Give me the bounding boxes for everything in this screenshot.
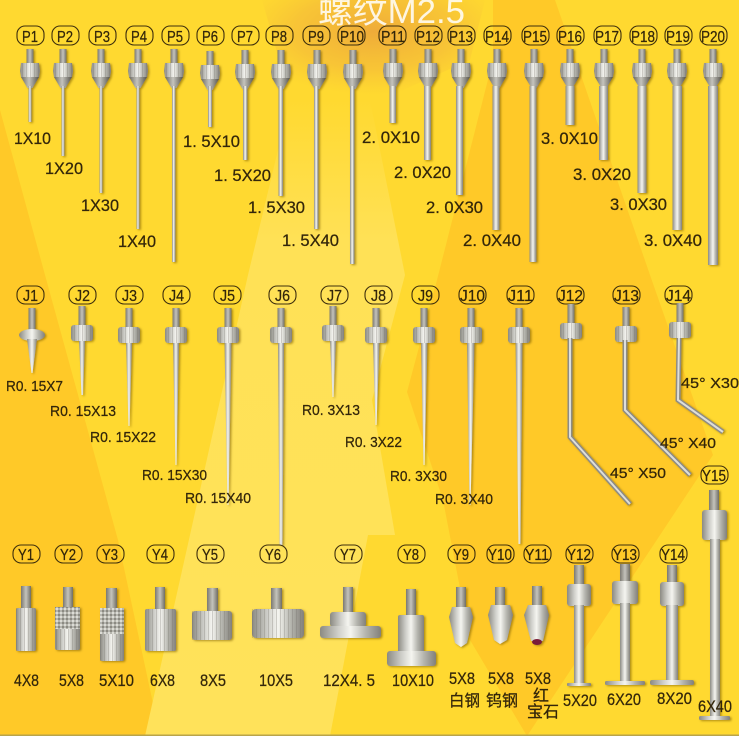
tag J3: J3: [122, 288, 137, 305]
pin P9: [307, 50, 327, 229]
pin J3: [118, 308, 140, 426]
size R0.15X22: R0. 15X22: [90, 429, 156, 446]
pin P2: [53, 49, 73, 156]
size 1X20: 1X20: [45, 160, 83, 178]
pin P5: [164, 49, 184, 262]
tag P13: P13: [449, 29, 473, 46]
pin J2: [71, 306, 93, 395]
tag P15: P15: [523, 29, 547, 46]
size 12X4.5: 12X4. 5: [323, 672, 375, 690]
tag Y1: [13, 545, 40, 564]
pin P13: [451, 49, 471, 195]
tag Y14: Y14: [661, 547, 685, 564]
tag J8: J8: [371, 288, 386, 305]
pin J8: [365, 308, 387, 425]
size and material Y10: 5X8: [488, 670, 514, 688]
size 1.5X20: 1. 5X20: [214, 167, 271, 185]
tag P6: P6: [202, 29, 218, 46]
size R0.3X22: R0. 3X22: [345, 434, 402, 451]
tag Y8: [398, 545, 425, 564]
size 6X8: 6X8: [150, 672, 175, 690]
pin J14, bent: [669, 303, 723, 432]
pin P8: [271, 50, 291, 196]
size 45 degree X30: 45° X30: [681, 375, 739, 392]
size 1.5X30: 1. 5X30: [248, 199, 305, 217]
pin J13, bent: [615, 307, 690, 475]
tag J2: [69, 286, 96, 305]
panel: P series pins: [14, 26, 727, 265]
size R0.3X13: R0. 3X13: [302, 402, 360, 419]
tag P12: P12: [416, 29, 440, 46]
tag Y3: Y3: [102, 547, 118, 564]
size 5X20: 5X20: [563, 692, 597, 710]
tag Y5: Y5: [202, 547, 218, 564]
tag J1: [17, 286, 44, 305]
tag J1: J1: [23, 288, 38, 305]
pin P18: [632, 49, 652, 193]
tag J4: J4: [169, 288, 184, 305]
tag Y5: [197, 545, 224, 564]
size 2.0X20: 2. 0X20: [394, 164, 451, 182]
tag P8: P8: [271, 29, 287, 46]
pin J5: [217, 308, 239, 505]
tag P11: P11: [381, 29, 405, 46]
pin P11: [383, 49, 403, 123]
tag J7: [321, 286, 348, 305]
size and material Y9: 5X8: [449, 670, 475, 688]
size 1X10: 1X10: [14, 130, 51, 148]
size and material Y11: 红: [533, 687, 549, 705]
size 8X5: 8X5: [200, 672, 226, 690]
pin J10: [460, 308, 482, 505]
size 3.0X20: 3. 0X20: [573, 166, 631, 184]
tag P16: P16: [558, 29, 582, 46]
tag P2: [52, 26, 79, 46]
tag Y4: Y4: [152, 547, 168, 564]
size and material Y11: [525, 670, 559, 721]
size R0.15X13: R0. 15X13: [50, 403, 116, 420]
pin P16: [560, 49, 580, 125]
tag P9: [303, 26, 330, 46]
pin P19: [667, 49, 687, 230]
tag Y4: [147, 545, 174, 564]
tag Y3: [97, 545, 124, 564]
pin P4: [128, 49, 148, 229]
pin P6: [200, 51, 220, 127]
tag P14: P14: [485, 29, 509, 46]
tag J14: J14: [666, 288, 691, 305]
tip Y10: [488, 587, 513, 644]
size 10X10: 10X10: [392, 672, 434, 690]
pin P1: [20, 49, 40, 122]
tip Y7: [320, 587, 381, 638]
tip Y1: [16, 586, 36, 651]
tag P2: P2: [57, 29, 73, 46]
size 2.0X30: 2. 0X30: [426, 199, 483, 217]
tag Y12: Y12: [567, 547, 591, 564]
tag J9: J9: [418, 288, 433, 305]
tag P6: [197, 26, 224, 46]
tag Y2: Y2: [60, 547, 76, 564]
size 3.0X40: 3. 0X40: [644, 232, 702, 250]
pin P20: [703, 49, 723, 265]
tag Y6: Y6: [265, 547, 281, 564]
tag J13: J13: [614, 288, 639, 305]
size and material Y11: 宝石: [527, 703, 559, 721]
size 6X40: 6X40: [698, 698, 732, 716]
size R0.15X7: R0. 15X7: [6, 378, 63, 395]
size 2.0X10: 2. 0X10: [362, 129, 420, 147]
size 1.5X40: 1. 5X40: [282, 232, 339, 250]
pin J1: [19, 308, 45, 373]
tag Y11: Y11: [525, 547, 549, 564]
tag J6: [269, 286, 296, 305]
tag J6: J6: [275, 288, 290, 305]
size 45 degree X40: 45° X40: [660, 435, 716, 452]
tag J2: J2: [75, 288, 90, 305]
pin P15: [524, 49, 544, 262]
tip Y4: [145, 587, 176, 651]
tag P20: P20: [701, 29, 725, 46]
tag P1: P1: [22, 29, 38, 46]
tag J5: J5: [220, 288, 235, 305]
tag P5: P5: [167, 29, 183, 46]
size 1.5X10: 1. 5X10: [183, 133, 240, 151]
size R0.15X40: R0. 15X40: [185, 490, 251, 507]
size 1X30: 1X30: [81, 197, 119, 215]
tag Y9: [448, 545, 475, 564]
pin P17: [594, 49, 614, 160]
tag P5: [162, 26, 189, 46]
tag P8: [266, 26, 293, 46]
size R0.3X40: R0. 3X40: [435, 491, 493, 508]
size and material Y9: 白钢: [449, 692, 480, 710]
tip Y6: [252, 588, 304, 638]
tag Y13: Y13: [613, 547, 637, 564]
tag P3: [89, 26, 116, 46]
panel: J series pins: [6, 286, 739, 545]
tip Y3: [100, 588, 124, 661]
pin P10: [343, 50, 363, 264]
size and material Y10: 钨钢: [486, 692, 518, 710]
size and material Y10: [486, 670, 518, 710]
tag J11: J11: [508, 288, 533, 305]
tag P3: P3: [94, 29, 110, 46]
pin J4: [165, 308, 187, 465]
tag J10: J10: [460, 288, 485, 305]
pin J9: [413, 308, 435, 465]
tip Y12: [567, 565, 591, 686]
tag Y9: Y9: [453, 547, 469, 564]
tag J5: [214, 286, 241, 305]
size 3.0X30: 3. 0X30: [610, 196, 667, 214]
pin P3: [91, 49, 111, 193]
tip Y2: [55, 587, 80, 650]
tag P17: P17: [595, 29, 619, 46]
tag J3: [116, 286, 143, 305]
tip Y14: [650, 565, 694, 685]
tag Y2: [55, 545, 82, 564]
size 2.0X40: 2. 0X40: [463, 232, 521, 250]
size 1X40: 1X40: [118, 233, 156, 251]
tip Y5: [192, 588, 232, 640]
tag P4: P4: [131, 29, 147, 46]
tag P4: [126, 26, 153, 46]
size and material Y11: 5X8: [525, 670, 551, 688]
size 5X8: 5X8: [59, 672, 84, 690]
pin P12: [418, 49, 438, 160]
size 6X20: 6X20: [607, 691, 641, 709]
tag P9: P9: [308, 29, 324, 46]
pin P14: [487, 49, 507, 230]
pin J12, bent: [560, 304, 630, 504]
tag Y15: Y15: [702, 468, 726, 485]
size 45 degree X50: 45° X50: [610, 465, 666, 482]
tip Y11 with ruby: [524, 586, 549, 645]
tag J7: J7: [327, 288, 342, 305]
tag P1: [17, 26, 44, 46]
pin J11: [508, 308, 530, 544]
size 5X10: 5X10: [99, 672, 134, 690]
tag Y6: [260, 545, 287, 564]
tag J12: J12: [558, 288, 583, 305]
tag J8: [365, 286, 392, 305]
tag P7: [232, 26, 259, 46]
size R0.3X30: R0. 3X30: [390, 468, 447, 485]
size 8X20: 8X20: [657, 690, 692, 708]
size 3.0X10: 3. 0X10: [541, 130, 598, 148]
size R0.15X30: R0. 15X30: [142, 467, 207, 484]
tip Y8: [387, 589, 436, 666]
tag Y8: Y8: [403, 547, 419, 564]
panel: Y series tips: [13, 466, 732, 721]
tag Y7: Y7: [340, 547, 356, 564]
pin P7: [235, 50, 255, 160]
tip Y9: [449, 587, 473, 647]
tag Y10: Y10: [488, 547, 512, 564]
size 4X8: 4X8: [14, 672, 39, 690]
tag Y7: [335, 545, 362, 564]
tag P18: P18: [631, 29, 655, 46]
size and material Y9: [449, 670, 480, 710]
tag J9: [412, 286, 439, 305]
tag P10: P10: [340, 29, 364, 46]
tag P19: P19: [666, 29, 690, 46]
tip Y13: [605, 564, 645, 685]
tag P7: P7: [237, 29, 253, 46]
pin J7: [322, 306, 344, 397]
tag Y1: Y1: [18, 547, 34, 564]
tag J4: [163, 286, 190, 305]
pin J6: [270, 308, 292, 545]
tip Y15: [699, 490, 730, 720]
size 10X5: 10X5: [259, 672, 293, 690]
